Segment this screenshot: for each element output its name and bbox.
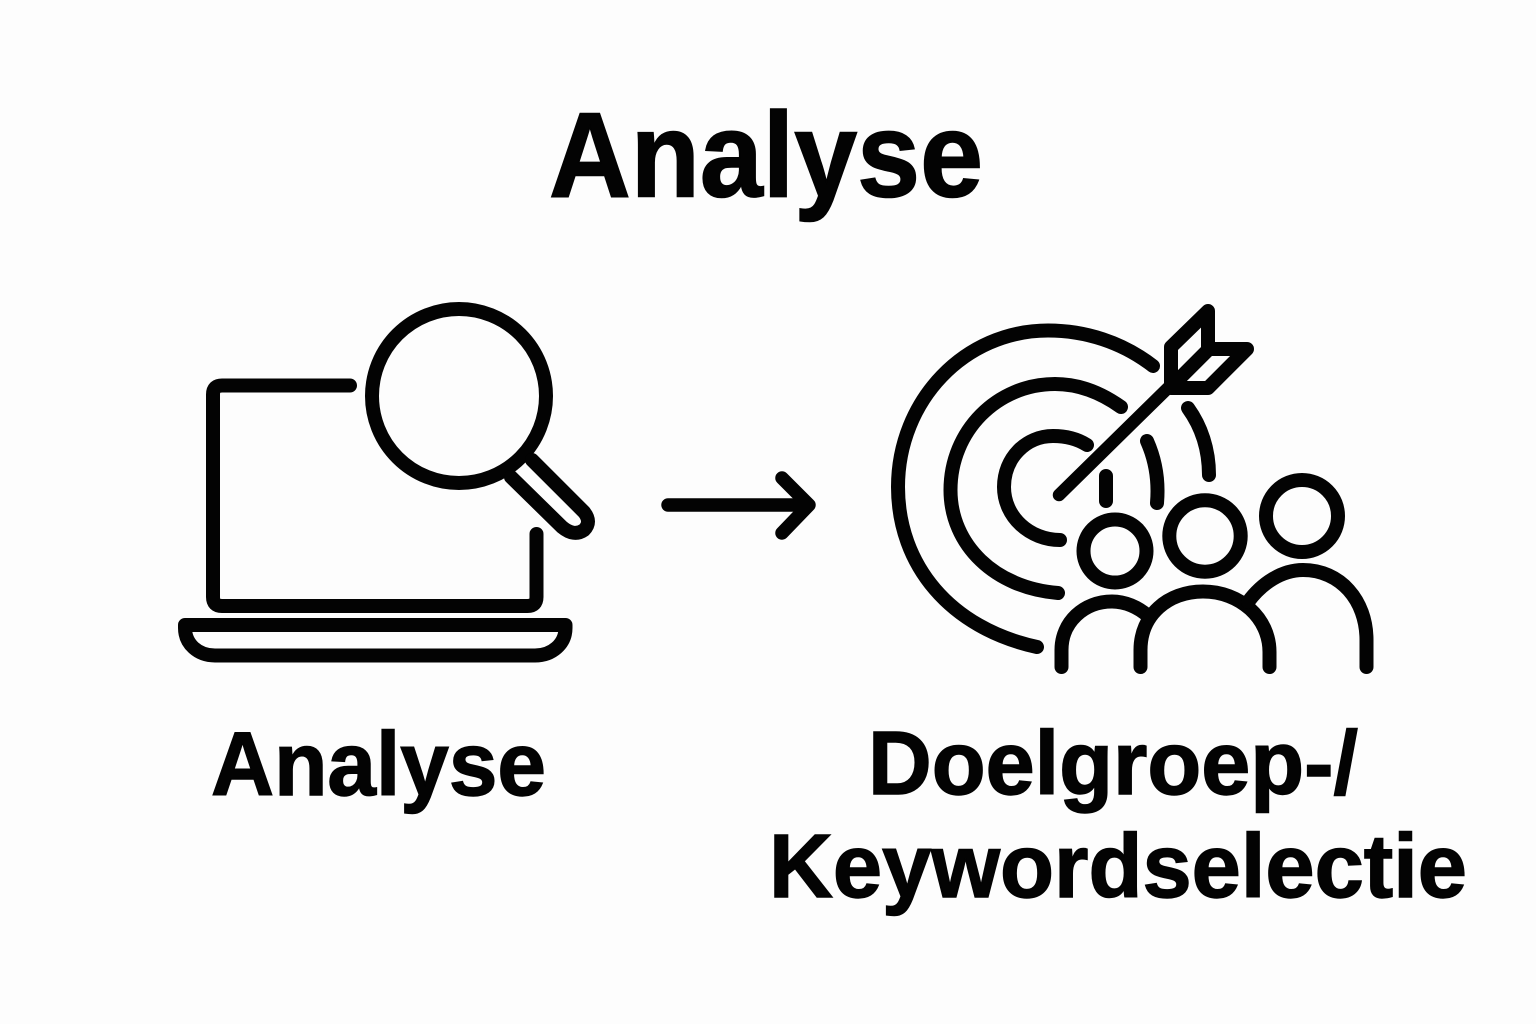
label line 2: Keywordselectie <box>769 817 1467 917</box>
broken right rings <box>1106 408 1209 503</box>
middle target ring <box>950 384 1121 593</box>
inner target ring <box>1004 436 1087 540</box>
magnifying glass lens <box>372 309 546 483</box>
arrow <box>668 478 809 533</box>
magnifying glass handle <box>511 460 588 533</box>
laptop screen <box>213 386 536 606</box>
icon: laptop with magnifying glass <box>185 309 588 656</box>
person right <box>1266 480 1338 552</box>
title: Analyse <box>549 86 983 222</box>
person left <box>1084 520 1146 582</box>
arrow fletching <box>1171 311 1247 388</box>
laptop base <box>185 625 566 656</box>
label: Doelgroep-/ Keywordselectie <box>769 714 1467 917</box>
label line 1: Doelgroep-/ <box>868 714 1358 814</box>
label: Analyse: Analyse <box>211 715 546 815</box>
arrow shaft <box>1059 385 1171 495</box>
outer target ring <box>898 330 1153 647</box>
icon: target with arrow and audience <box>898 311 1366 667</box>
person middle <box>1169 500 1241 572</box>
